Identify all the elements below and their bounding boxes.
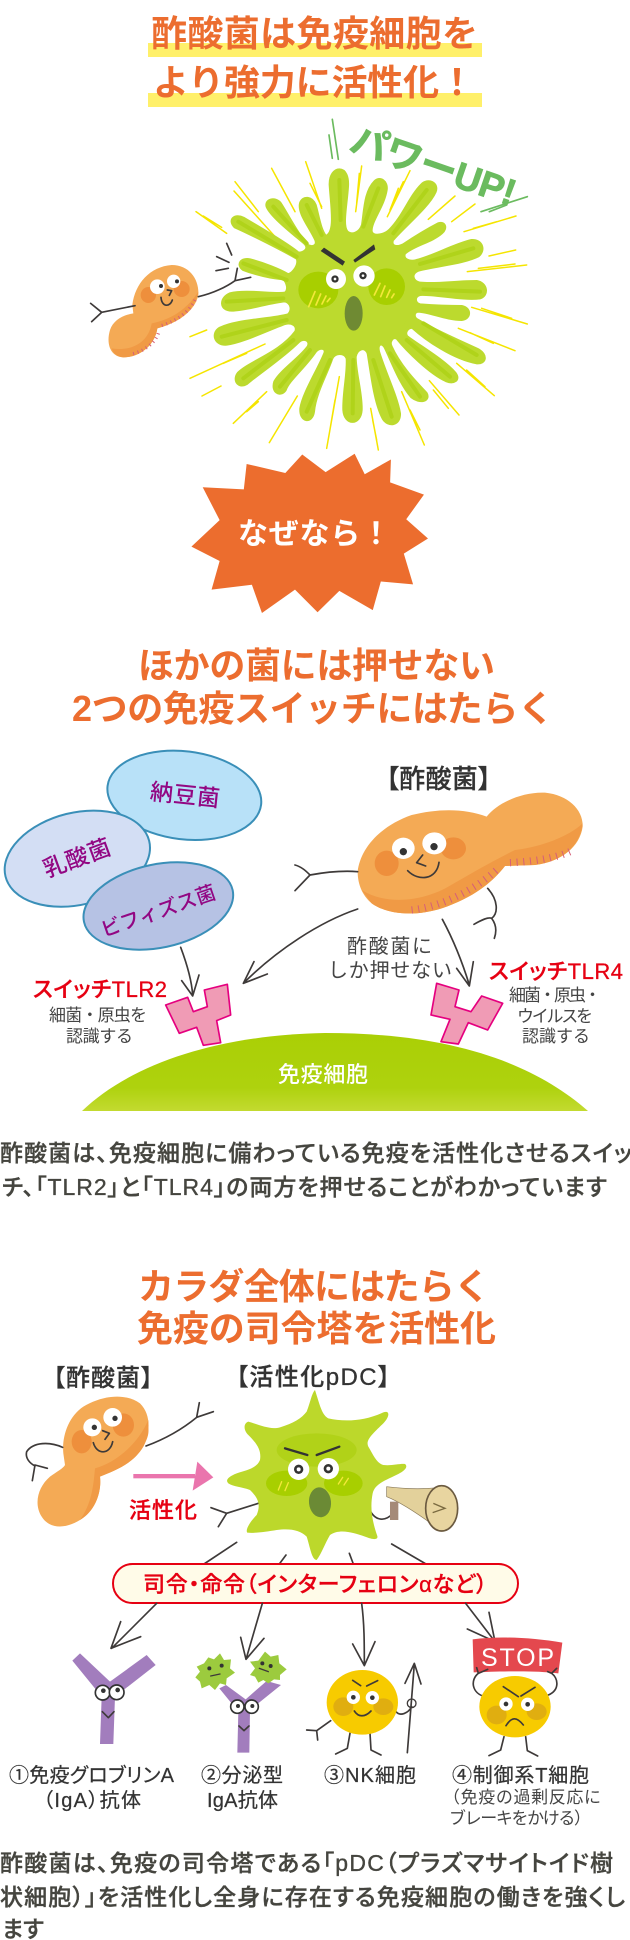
body text: pDC — [0, 1850, 625, 1940]
title: 酢酸菌は免疫細胞を — [151, 13, 478, 54]
label: secretory IgA — [201, 1764, 283, 1812]
heading: command tower: 免疫の司令塔を活性化 — [137, 1308, 496, 1349]
command pill — [113, 1564, 518, 1603]
command pill: 司令・命令（インターフェロンαなど） — [143, 1572, 487, 1597]
immune cell dome — [82, 1033, 588, 1111]
heading: two switches: ほかの菌には押せない — [138, 645, 495, 686]
bacteria names — [40, 778, 221, 942]
label: TLR4: ウイルスを — [517, 1007, 593, 1026]
title — [148, 13, 482, 107]
diagram: pDC activation — [9, 1364, 601, 1828]
arrows to right targets — [353, 1603, 495, 1666]
orange bacterium — [91, 243, 251, 357]
activated pDC cell — [211, 1390, 406, 1560]
label: acetic acid bacteria: 【酢酸菌】 — [386, 764, 491, 794]
NK cell — [307, 1663, 421, 1755]
bacterium and arrows — [181, 793, 583, 996]
regulatory T cell with stop sign — [473, 1638, 562, 1756]
label: TLR2 — [33, 977, 167, 1046]
body text: pDC: 酢酸菌は、免疫の司令塔である「pDC（プラズマサイトイド樹 — [0, 1850, 613, 1876]
label: NK: ③NK細胞 — [324, 1764, 416, 1787]
body text: pDC: 状細胞）」を活性化し全身に存在する免疫細胞の働きを強くし — [0, 1884, 625, 1910]
label: TLR4: 認識する — [522, 1027, 590, 1046]
label: TLR4 — [489, 959, 623, 1046]
label: TLR4: スイッチTLR4 — [489, 959, 623, 984]
label: regulatory T: ブレーキをかける） — [449, 1808, 591, 1828]
antibody 2 with germs — [195, 1652, 287, 1753]
green lines — [329, 119, 527, 212]
label: IgA: ①免疫グロブリンA — [9, 1763, 175, 1787]
label: activate: 活性化 — [129, 1498, 197, 1523]
bacteria names: 乳酸菌 — [40, 834, 114, 882]
title: より強力に活性化！ — [153, 62, 475, 103]
arrows to left targets — [111, 1603, 264, 1659]
label: IgA — [9, 1763, 175, 1812]
label: IgA: （IgA）抗体 — [43, 1789, 141, 1812]
body text: switches: チ、「TLR2」と「TLR4」の両方を押せることがわかっています — [2, 1174, 607, 1200]
starburst badge — [191, 454, 428, 613]
body text: switches — [0, 1140, 630, 1200]
bacterium — [26, 1397, 213, 1526]
label: only acetic — [328, 935, 452, 982]
bacteria names: ビフィズス菌 — [98, 881, 219, 942]
label: only acetic: しか押せない — [328, 959, 452, 982]
heading: two switches — [72, 645, 554, 729]
label: regulatory T: ④制御系T細胞 — [452, 1764, 589, 1787]
label: bacteria: 【酢酸菌】 — [53, 1365, 153, 1392]
antibody 1 — [72, 1653, 156, 1744]
diagram: TLR switches — [0, 742, 623, 1111]
connector lines — [204, 1542, 426, 1564]
label: regulatory T — [443, 1764, 601, 1828]
stop text: STOP — [481, 1644, 554, 1672]
green immune cell — [215, 170, 485, 424]
heading: command tower — [137, 1266, 496, 1349]
starburst badge: なぜなら！ — [238, 518, 391, 551]
TLR receptors — [166, 983, 503, 1045]
label: regulatory T: （免疫の過剰反応に — [443, 1788, 601, 1807]
icon: megaphone — [387, 1486, 458, 1531]
other bacteria ellipses — [0, 742, 266, 963]
label: TLR2: 認識する — [66, 1027, 133, 1046]
label: TLR4: 細菌・原虫・ — [509, 986, 601, 1005]
heading: command tower: カラダ全体にはたらく — [138, 1266, 490, 1307]
label: only acetic: 酢酸菌に — [347, 935, 432, 958]
illustration: power up — [190, 119, 527, 450]
label: secretory IgA: ②分泌型 — [201, 1764, 283, 1787]
heading: two switches: 2つの免疫スイッチにはたらく — [72, 688, 554, 729]
pink arrow — [133, 1462, 213, 1491]
label: TLR2: スイッチTLR2 — [33, 977, 167, 1002]
bacteria names: 納豆菌 — [149, 778, 221, 812]
label: immune cell: 免疫細胞 — [278, 1062, 368, 1087]
power up lettering: パワーUP! — [345, 119, 521, 214]
label: TLR2: 細菌・原虫を — [49, 1006, 147, 1025]
body text: switches: 酢酸菌は、免疫細胞に備わっている免疫を活性化させるスイッ — [0, 1140, 630, 1166]
label: secretory IgA: IgA抗体 — [207, 1789, 278, 1812]
label: activated pDC: 【活性化pDC】 — [236, 1364, 390, 1391]
yellow burst rays — [190, 162, 527, 450]
